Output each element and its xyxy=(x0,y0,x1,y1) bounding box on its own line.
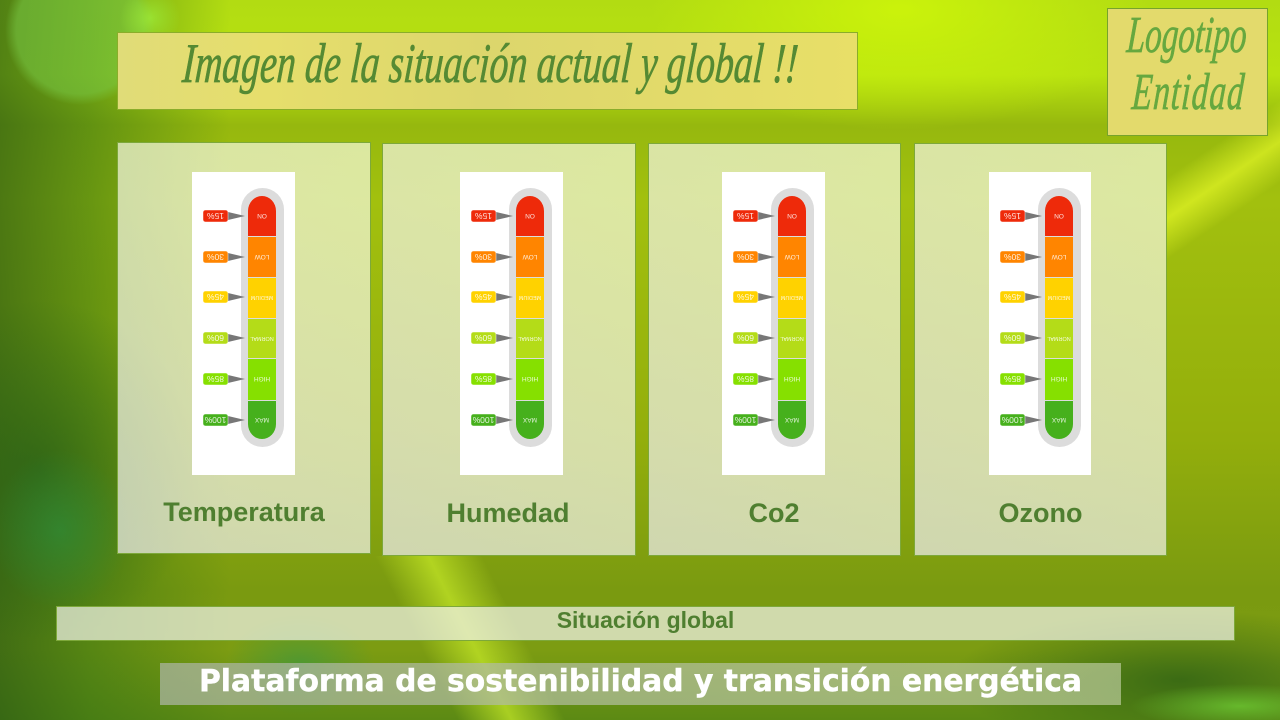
gauge: Temperatura: NORMAL xyxy=(250,335,274,341)
logo text xyxy=(1125,7,1249,121)
label: Humedad: Humedad xyxy=(446,498,570,528)
gauge: Co2: 100% xyxy=(734,415,756,425)
gauge: Co2: LOW xyxy=(784,253,799,260)
panel: Co2 xyxy=(648,143,901,556)
panel: Ozono xyxy=(914,143,1167,556)
gauge: Ozono: LOW xyxy=(1051,253,1066,260)
gauge: Humedad: 15% xyxy=(475,211,492,221)
gauge: Temperatura: HIGH xyxy=(254,375,270,382)
gauge: Temperatura: LOW xyxy=(254,253,269,260)
gauge: Temperatura: 100% xyxy=(204,415,226,425)
gauge: Ozono: 60% xyxy=(1004,333,1021,343)
gauge: Temperatura: MEDIUM xyxy=(250,294,273,300)
gauge: Ozono xyxy=(989,172,1091,475)
gauge: Co2: MEDIUM xyxy=(780,294,803,300)
global status bar: Situación global xyxy=(557,607,734,633)
gauge: Ozono: 45% xyxy=(1004,292,1021,302)
gauge: Co2: 45% xyxy=(737,292,754,302)
gauge: Humedad: 60% xyxy=(475,333,492,343)
footer banner: Plataforma de sostenibilidad y transición energética xyxy=(199,664,1082,699)
gauge: Ozono: 85% xyxy=(1004,374,1021,384)
gauge: Ozono: NORMAL xyxy=(1047,335,1071,341)
gauge: Temperatura xyxy=(192,172,295,475)
gauge: Co2: NORMAL xyxy=(780,335,804,341)
gauge: Co2: MAX xyxy=(784,416,799,423)
gauge: Humedad: LOW xyxy=(522,253,537,260)
gauge: Temperatura: 45% xyxy=(207,292,224,302)
gauge: Co2: ON xyxy=(787,212,797,219)
label: Co2: Co2 xyxy=(748,498,800,528)
gauge: Co2: 85% xyxy=(737,374,754,384)
gauge: Co2: HIGH xyxy=(784,375,800,382)
panel: Temperatura xyxy=(117,142,371,554)
label: Ozono: Ozono xyxy=(998,498,1082,528)
gauge: Ozono: ON xyxy=(1054,212,1064,219)
gauge: Co2: 15% xyxy=(737,211,754,221)
gauge: Humedad: 85% xyxy=(475,374,492,384)
gauge: Ozono: MEDIUM xyxy=(1047,294,1070,300)
gauge: Humedad: ON xyxy=(525,212,535,219)
gauge: Temperatura: 60% xyxy=(207,333,224,343)
gauge: Temperatura: ON xyxy=(257,212,267,219)
gauge: Humedad: 100% xyxy=(472,415,494,425)
gauge: Temperatura: 15% xyxy=(207,211,224,221)
logo text: Entidad xyxy=(1130,64,1247,121)
gauge: Temperatura: 85% xyxy=(207,374,224,384)
label: Temperatura: Temperatura xyxy=(163,497,325,527)
global status bar xyxy=(56,606,1235,641)
gauge: Temperatura: 30% xyxy=(207,252,224,262)
gauge: Temperatura: MAX xyxy=(254,416,269,423)
gauge: Humedad: MAX xyxy=(522,416,537,423)
gauge: Co2 xyxy=(722,172,825,475)
gauge: Ozono: 100% xyxy=(1001,415,1023,425)
gauge: Humedad: 45% xyxy=(475,292,492,302)
title banner xyxy=(117,32,858,110)
gauge: Humedad: HIGH xyxy=(522,375,538,382)
logo text: Logotipo xyxy=(1125,7,1249,64)
panel: Humedad xyxy=(382,143,636,556)
gauge: Ozono: MAX xyxy=(1051,416,1066,423)
gauge: Humedad: NORMAL xyxy=(518,335,542,341)
gauge: Ozono: 30% xyxy=(1004,252,1021,262)
gauge: Humedad xyxy=(460,172,563,475)
gauge: Humedad: 30% xyxy=(475,252,492,262)
background glow: top right xyxy=(640,0,1280,135)
gauge: Ozono: HIGH xyxy=(1051,375,1067,382)
gauge: Co2: 30% xyxy=(737,252,754,262)
title text: Imagen de la situación actual y global !! xyxy=(181,33,800,95)
gauge: Co2: 60% xyxy=(737,333,754,343)
gauge: Ozono: 15% xyxy=(1004,211,1021,221)
gauge: Humedad: MEDIUM xyxy=(518,294,541,300)
logo placeholder box xyxy=(1107,8,1268,136)
